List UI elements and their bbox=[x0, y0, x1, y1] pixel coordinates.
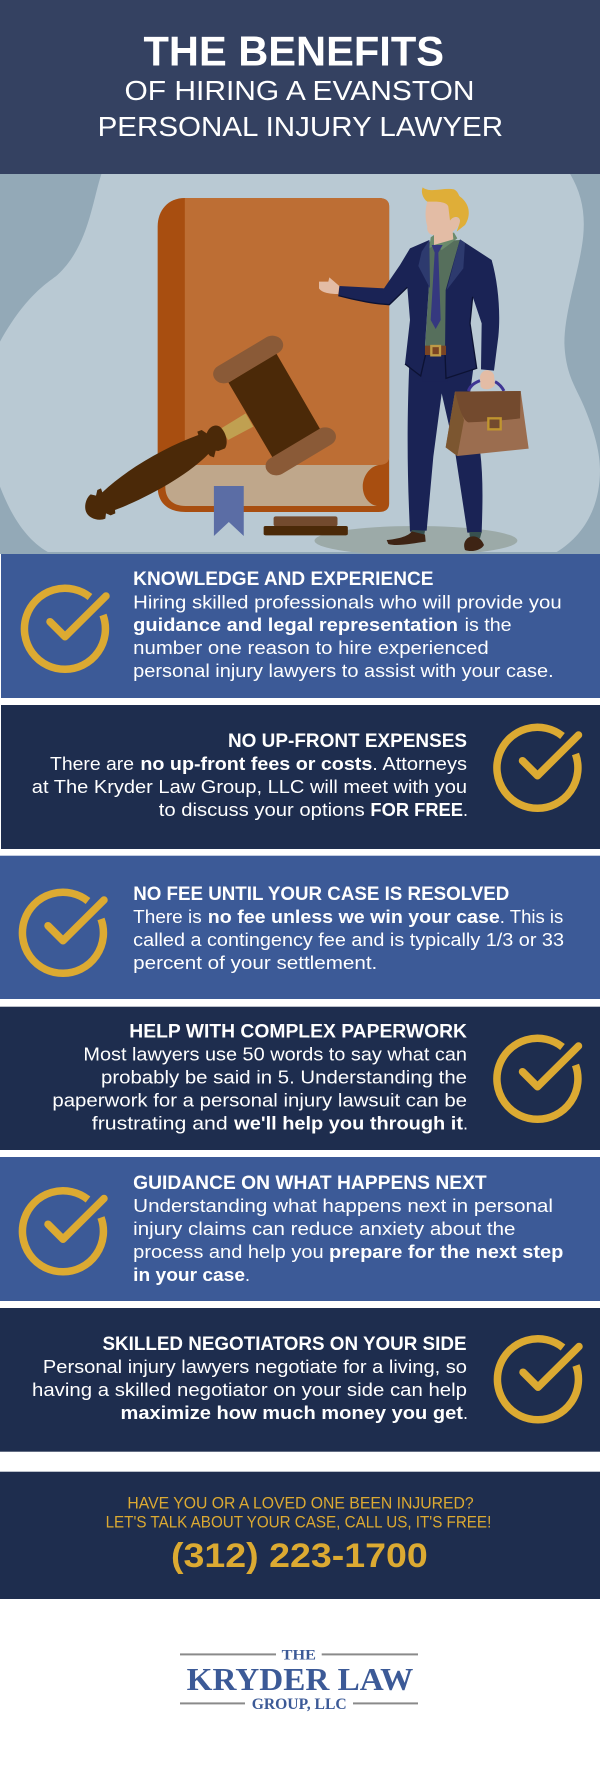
body text bbox=[133, 907, 564, 973]
hero background bbox=[0, 174, 600, 554]
phone number: (312) 223-1700 bbox=[171, 1537, 428, 1575]
body text: is the bbox=[465, 615, 512, 635]
body text: in your case bbox=[133, 1265, 245, 1285]
heading: NO UP-FRONT EXPENSES bbox=[228, 731, 467, 752]
panel: knowledge and experience bbox=[1, 554, 600, 698]
body text: personal injury lawyers to assist with your case. bbox=[133, 661, 554, 681]
body text: probably be said in 5. Understanding the bbox=[101, 1067, 467, 1087]
gavel sound block bbox=[264, 516, 348, 535]
body text: Understanding what happens next in personal bbox=[133, 1196, 553, 1216]
body text bbox=[133, 1196, 563, 1285]
banner background bbox=[0, 1472, 600, 1599]
panel: help with complex paperwork bbox=[0, 1007, 600, 1150]
icon: check circle bbox=[497, 727, 578, 808]
body text: called a contingency fee and is typically 1/3 or 33 bbox=[133, 930, 564, 950]
bookmark bbox=[214, 486, 244, 536]
body text: to discuss your options bbox=[159, 800, 365, 820]
panel: no fee until resolved bbox=[0, 856, 600, 999]
title: the benefits: THE BENEFITS bbox=[144, 28, 444, 75]
panel: skilled negotiators bbox=[0, 1308, 600, 1452]
panel background bbox=[0, 1308, 600, 1452]
panel: header bbox=[0, 0, 600, 174]
panel: call to action bbox=[0, 1472, 600, 1599]
background blob bbox=[0, 174, 600, 552]
body text: prepare for the next step bbox=[329, 1242, 563, 1262]
logo: KRYDER LAW bbox=[187, 1661, 413, 1697]
heading: NO FEE UNTIL YOUR CASE IS RESOLVED bbox=[133, 884, 509, 905]
hero illustration bbox=[0, 174, 600, 555]
body text: no fee unless we win your case bbox=[208, 907, 500, 927]
icon: check circle bbox=[22, 892, 104, 973]
heading: SKILLED NEGOTIATORS ON YOUR SIDE bbox=[102, 1334, 466, 1355]
body text: FOR FREE bbox=[370, 800, 463, 820]
body text: . bbox=[463, 800, 468, 820]
ground shadow bbox=[315, 526, 517, 555]
panel background bbox=[0, 1157, 600, 1301]
body text: . bbox=[463, 1113, 468, 1133]
body text: no up-front fees or costs bbox=[140, 754, 372, 774]
call to action line 1: HAVE YOU OR A LOVED ONE BEEN INJURED? bbox=[127, 1495, 474, 1513]
panel background bbox=[1, 705, 600, 849]
panel background bbox=[1, 554, 600, 698]
icon: check circle bbox=[22, 1191, 104, 1272]
body text bbox=[133, 592, 562, 681]
body text: percent of your settlement. bbox=[133, 953, 377, 973]
body text: Personal injury lawyers negotiate for a living, so bbox=[43, 1357, 467, 1377]
panel: no up-front expenses bbox=[1, 705, 600, 849]
gavel bbox=[85, 345, 325, 520]
body text: paperwork for a personal injury lawsuit can be bbox=[52, 1090, 467, 1110]
icon: check circle bbox=[497, 1339, 579, 1420]
panel background bbox=[0, 1007, 600, 1150]
body text: injury claims can reduce anxiety about the bbox=[133, 1219, 515, 1239]
logo: THE bbox=[282, 1647, 316, 1663]
body text: Hiring skilled professionals who will provide you bbox=[133, 592, 562, 612]
logo bbox=[180, 1647, 418, 1713]
body text: . bbox=[245, 1265, 250, 1285]
body text: There is bbox=[133, 907, 202, 927]
subtitle line 1: OF HIRING A EVANSTON bbox=[124, 75, 474, 106]
lawyer figure bbox=[319, 187, 504, 551]
panel: guidance on what happens next bbox=[0, 1157, 600, 1301]
body text: maximize how much money you get bbox=[120, 1403, 463, 1423]
body text: Most lawyers use 50 words to say what can bbox=[83, 1044, 467, 1064]
call to action line 2: LET'S TALK ABOUT YOUR CASE, CALL US, IT'S FREE! bbox=[106, 1514, 491, 1532]
heading: KNOWLEDGE AND EXPERIENCE bbox=[133, 569, 433, 590]
book bbox=[158, 198, 389, 512]
briefcase bbox=[446, 391, 529, 456]
heading: HELP WITH COMPLEX PAPERWORK bbox=[129, 1021, 467, 1042]
body text: we'll help you through it bbox=[233, 1113, 463, 1133]
body text: frustrating and bbox=[92, 1113, 228, 1133]
body text: number one reason to hire experienced bbox=[133, 638, 489, 658]
body text bbox=[32, 754, 468, 820]
body text: There are bbox=[50, 754, 134, 774]
body text bbox=[52, 1044, 468, 1133]
icon: check circle bbox=[497, 1038, 578, 1119]
panel background bbox=[0, 856, 600, 999]
body text: having a skilled negotiator on your side can help bbox=[32, 1380, 467, 1400]
heading: GUIDANCE ON WHAT HAPPENS NEXT bbox=[133, 1173, 487, 1194]
subtitle line 2: PERSONAL INJURY LAWYER bbox=[98, 111, 503, 142]
body text: . This is bbox=[500, 907, 563, 927]
body text: guidance and legal representation bbox=[133, 615, 458, 635]
body text: . bbox=[463, 1403, 468, 1423]
body text bbox=[32, 1357, 468, 1423]
body text: process and help you bbox=[133, 1242, 324, 1262]
icon: check circle bbox=[24, 588, 106, 669]
header background bbox=[0, 0, 600, 174]
logo: GROUP, LLC bbox=[252, 1696, 347, 1713]
body text: . Attorneys bbox=[372, 754, 467, 774]
body text: at The Kryder Law Group, LLC will meet with you bbox=[32, 777, 467, 797]
